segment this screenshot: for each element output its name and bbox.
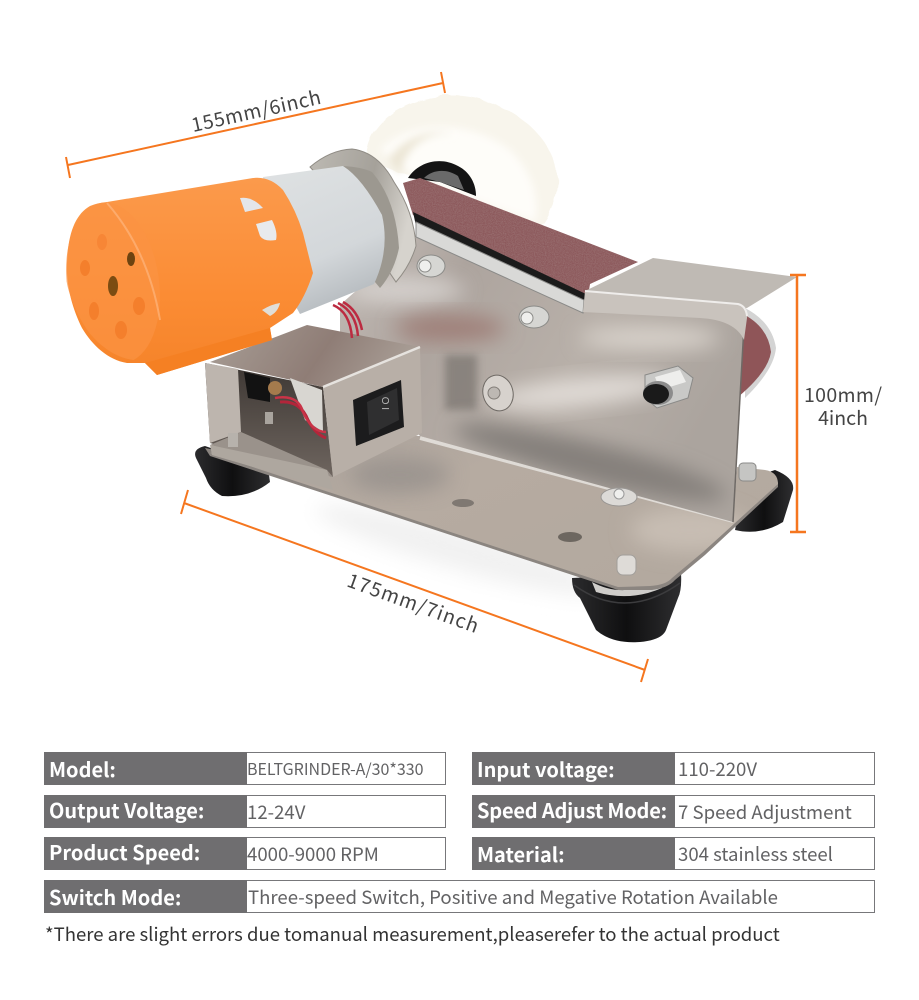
fasteners — [228, 255, 756, 575]
motor flange — [310, 149, 416, 282]
spec: material: 304 stainless steel — [678, 840, 833, 867]
sanding belt — [403, 178, 638, 306]
rocker switch: I O — [381, 396, 392, 410]
guard plate — [583, 258, 797, 340]
product illustration with dimensions — [65, 72, 882, 682]
spec: model: Model: — [49, 754, 116, 783]
spec: speed adjust mode: Speed Adjust Mode: — [477, 795, 667, 824]
spec: material: Material: — [477, 839, 565, 868]
dimension: depth 175mm/7inch — [181, 490, 648, 682]
vent holes — [80, 234, 145, 339]
ground shadow — [310, 489, 610, 611]
footnote: *There are slight errors due tomanual measurement,pleaserefer to the actual product — [45, 920, 780, 947]
spec: output voltage: 12-24V — [247, 798, 305, 825]
spec: input voltage — [472, 752, 875, 785]
belt guide rail — [416, 222, 584, 313]
spec: output voltage: Output Voltage: — [49, 795, 204, 824]
motor body — [263, 166, 399, 314]
dimension: height 100mm/4inch: 4inch — [818, 402, 868, 431]
spec: product speed: Product Speed: — [49, 837, 200, 866]
spec: material — [472, 837, 875, 870]
dimension: depth 175mm/7inch: 175mm/7inch — [344, 564, 483, 639]
spec: switch mode: Switch Mode: — [49, 882, 181, 911]
vertical wall — [340, 237, 745, 522]
spec: product speed — [44, 837, 446, 870]
spec: model: BELTGRINDER-A/30*330 — [247, 756, 424, 780]
right belt loop — [738, 308, 776, 398]
dimension: width 155mm/6inch — [66, 72, 445, 178]
red wires — [333, 302, 362, 338]
spec: input voltage: 110-220V — [678, 755, 757, 782]
spec: switch mode — [44, 880, 875, 913]
switch housing — [205, 325, 422, 490]
rear left foot — [195, 446, 270, 496]
dimension: width 155mm/6inch: 155mm/6inch — [188, 81, 323, 138]
spec: model — [44, 752, 446, 785]
base plate — [205, 432, 778, 590]
dimension: height 100mm/4inch: 100mm/ — [804, 379, 882, 408]
spec: input voltage: Input voltage: — [477, 754, 615, 783]
polishing wheel — [366, 96, 558, 228]
spec: speed adjust mode: 7 Speed Adjustment — [678, 798, 852, 825]
rear right foot — [735, 470, 793, 532]
spec: speed adjust mode — [472, 795, 875, 828]
dimension: height 100mm/4inch — [790, 275, 882, 532]
rocker switch — [353, 380, 404, 446]
orange end cap — [56, 178, 313, 375]
spec: switch mode: Three-speed Switch, Positive and Megative Rotation Available — [248, 883, 778, 910]
spec: product speed: 4000-9000 RPM — [247, 840, 379, 867]
front foot — [572, 573, 681, 642]
spec: output voltage — [44, 795, 446, 828]
cap slots — [240, 198, 280, 316]
